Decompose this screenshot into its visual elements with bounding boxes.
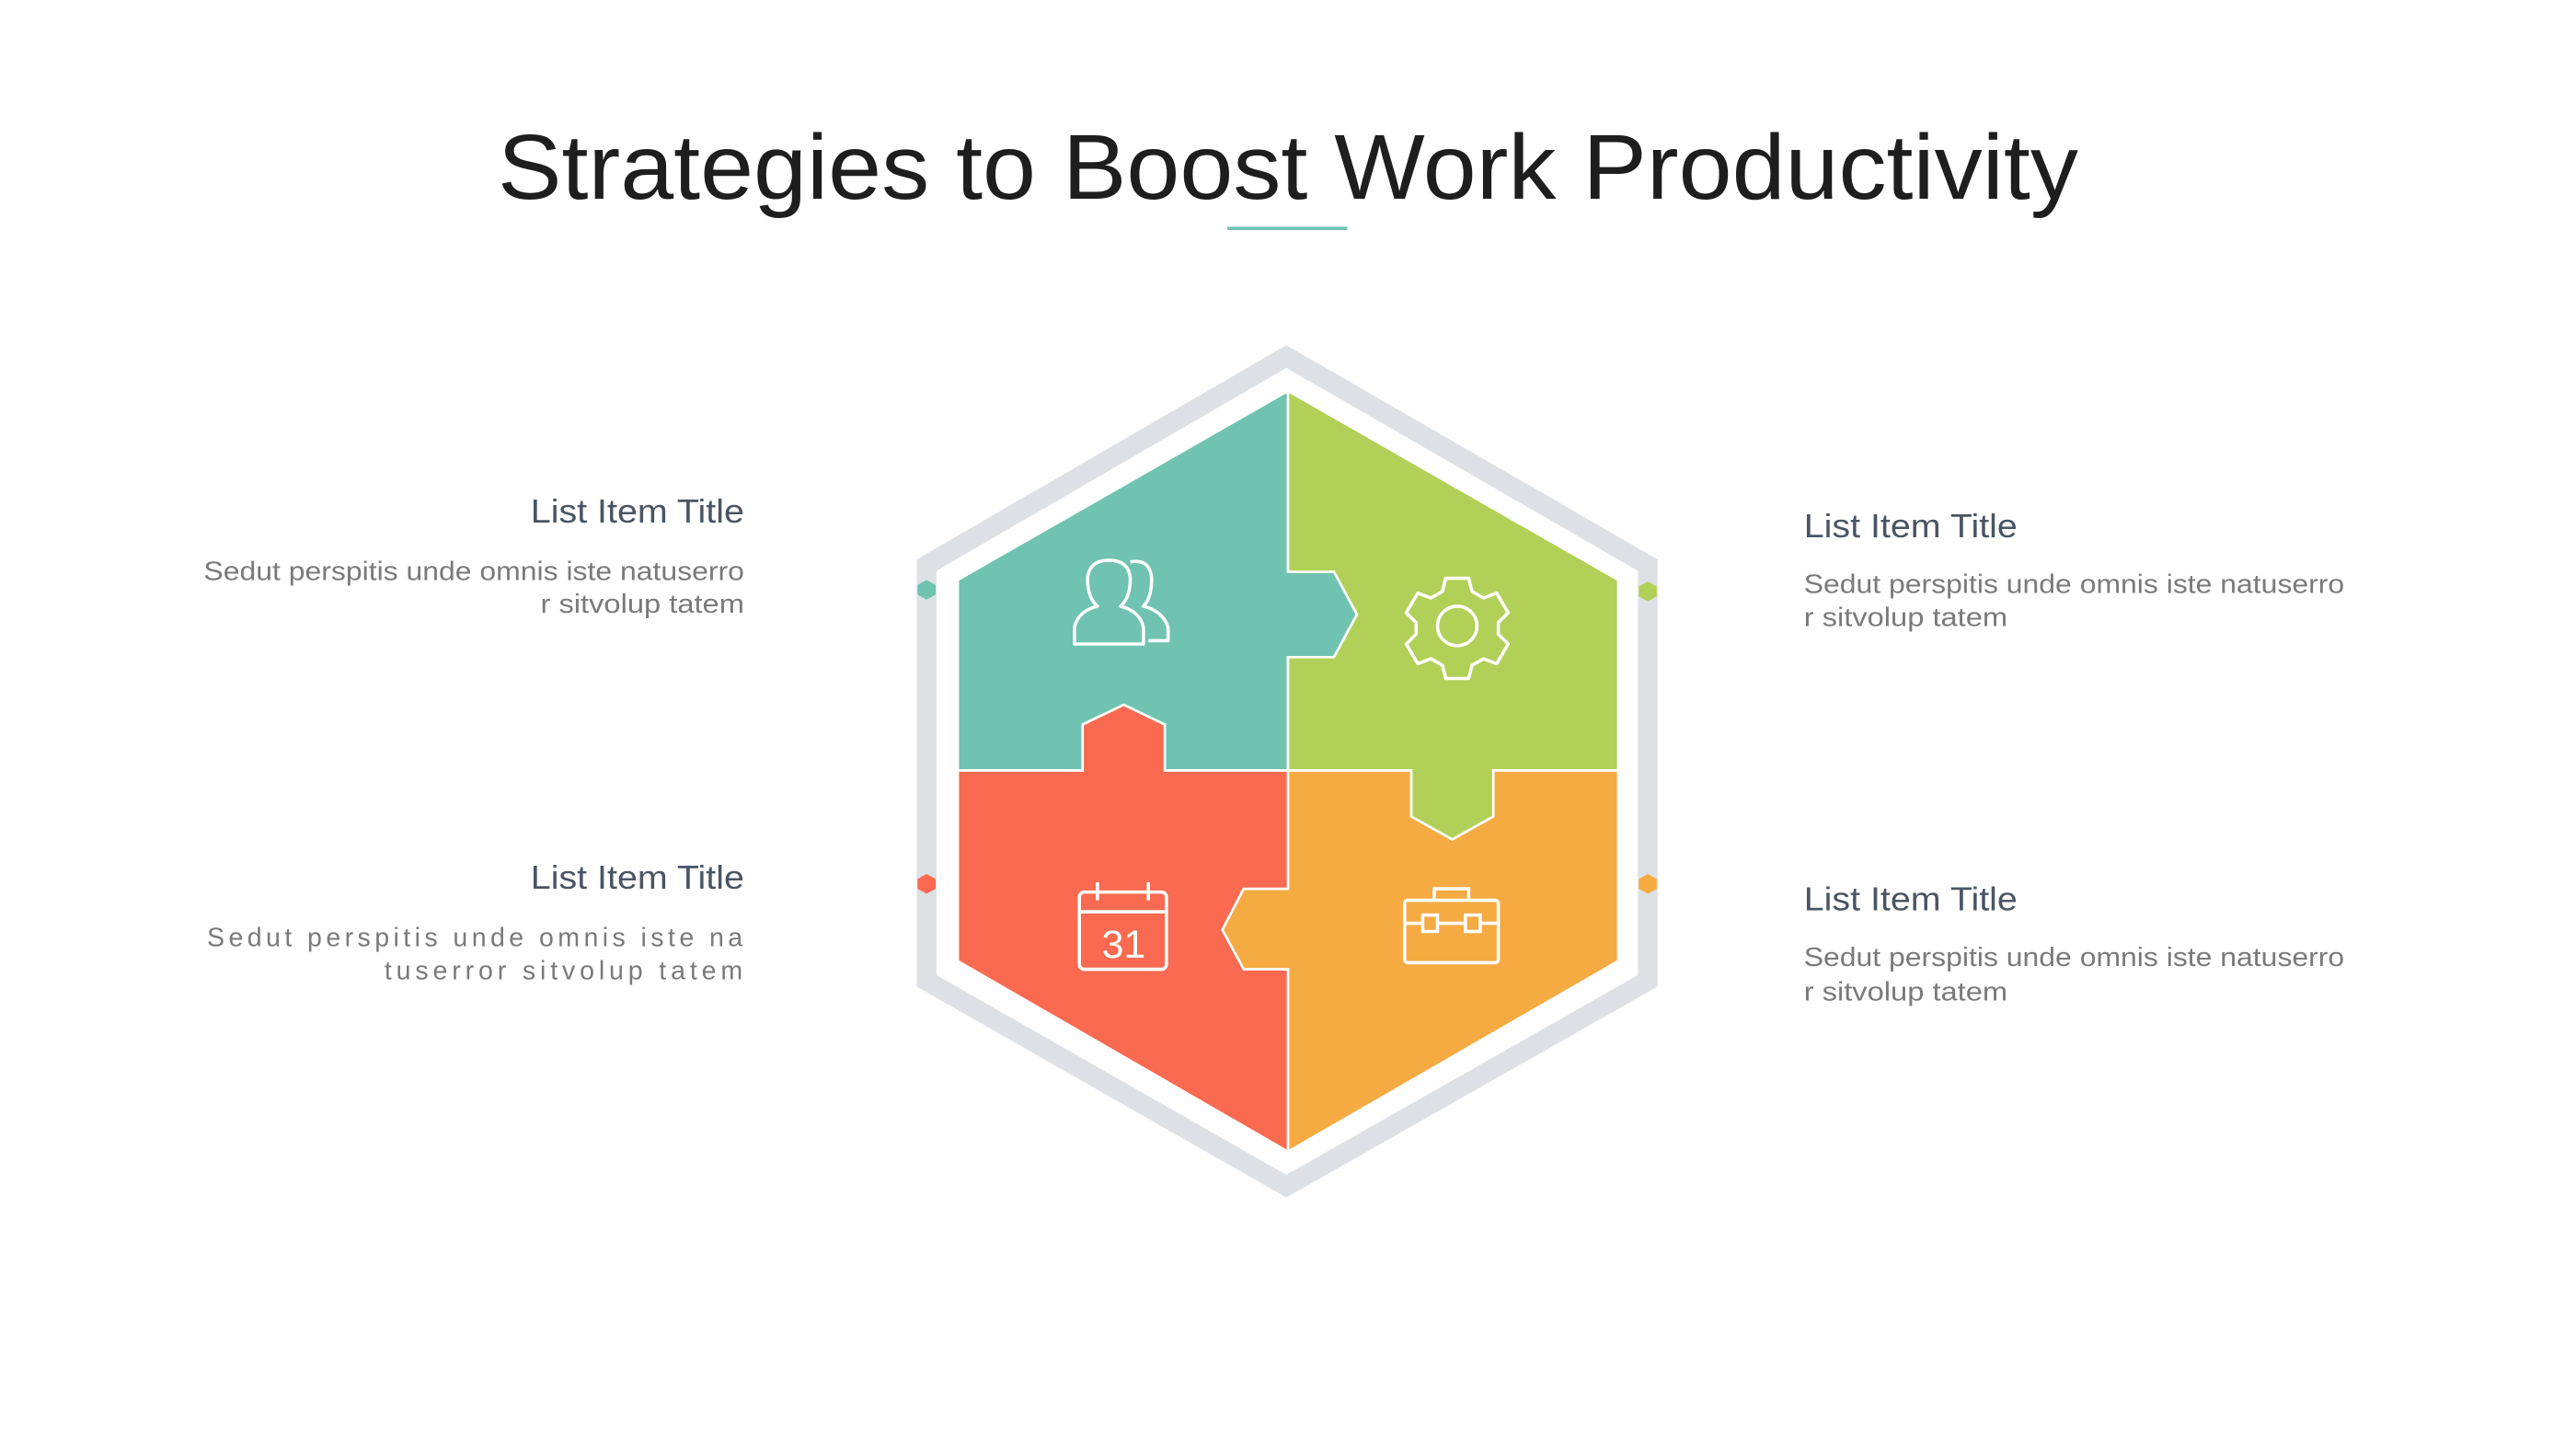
text block: top right [1804, 508, 2344, 632]
icon: briefcase [1405, 889, 1499, 962]
text block: bottom left: Sedut perspitis unde omnis iste na [207, 924, 742, 953]
text block: top left: r sitvolup tatem [541, 590, 744, 619]
icon: people [1075, 560, 1168, 644]
text block: top right: List Item Title [1804, 508, 2018, 545]
puzzle: teal piece [958, 391, 1357, 771]
puzzle: red piece [958, 705, 1288, 1152]
icon: calendar: 31 [1102, 923, 1145, 967]
hexagon frame [926, 357, 1648, 1186]
text block: bottom left: List Item Title [531, 859, 744, 896]
text block: top left: Sedut perspitis unde omnis iste natuserro [203, 557, 744, 586]
text block: bottom left [207, 859, 744, 985]
icon: gear [1407, 579, 1508, 679]
icon: calendar [1079, 882, 1167, 970]
marker dots [917, 580, 1657, 893]
text block: bottom right: Sedut perspitis unde omnis iste natuserro [1804, 943, 2344, 972]
puzzle: green piece [1288, 391, 1618, 839]
title: Strategies to Boost Work Productivity [498, 116, 2078, 219]
text block: bottom right [1804, 880, 2344, 1006]
text block: bottom left: tuserror sitvolup tatem [385, 956, 742, 985]
text block: bottom right: List Item Title [1804, 880, 2018, 917]
puzzle: orange piece [1223, 771, 1618, 1152]
text block: top left: List Item Title [531, 493, 744, 530]
text block: top left [203, 493, 744, 619]
text block: top right: Sedut perspitis unde omnis iste natuserro [1804, 570, 2344, 600]
text block: top right: r sitvolup tatem [1804, 603, 2007, 632]
text block: bottom right: r sitvolup tatem [1804, 977, 2007, 1007]
